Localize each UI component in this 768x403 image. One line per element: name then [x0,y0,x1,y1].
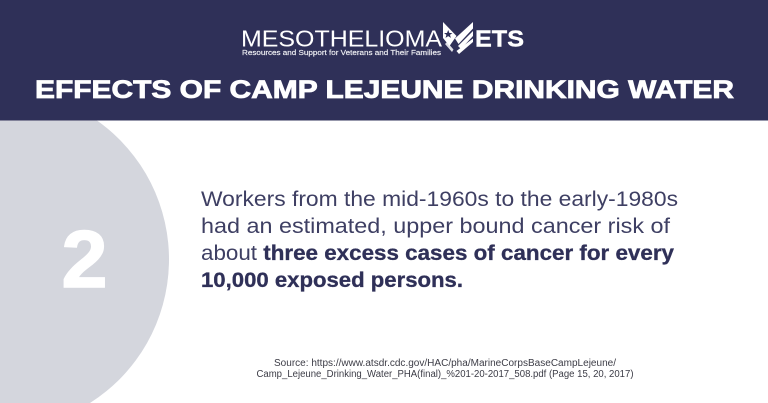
number 2: 2 [62,215,108,305]
source citation: Source: https://www.atsdr.cdc.gov/HAC/pha/MarineCorpsBaseCampLejeune/ [274,358,616,369]
body text [201,188,678,292]
source citation [256,358,634,380]
logo wordmark left: MESOTHELIOMA [241,26,443,52]
source citation: Camp_Lejeune_Drinking_Water_PHA(final)_%201-20-2017_508.pdf (Page 15, 20, 2017) [256,369,634,380]
panel: number circle [0,120,169,403]
icon: chevron with star and stripes [443,22,473,54]
logo wordmark right: ETS [475,26,524,52]
logo tagline: Resources and Support for Veterans and Their Families [242,50,442,57]
logo: Mesothelioma Vets [241,22,524,57]
body text: Workers from the mid-1960s to the early-1980s [201,188,678,211]
body text: about three excess cases of cancer for every [201,242,674,265]
title: EFFECTS OF CAMP LEJEUNE DRINKING WATER [35,76,734,104]
body text: 10,000 exposed persons. [201,269,463,292]
body text: had an estimated, upper bound cancer risk of [201,215,670,238]
panel: header band [0,0,768,120]
